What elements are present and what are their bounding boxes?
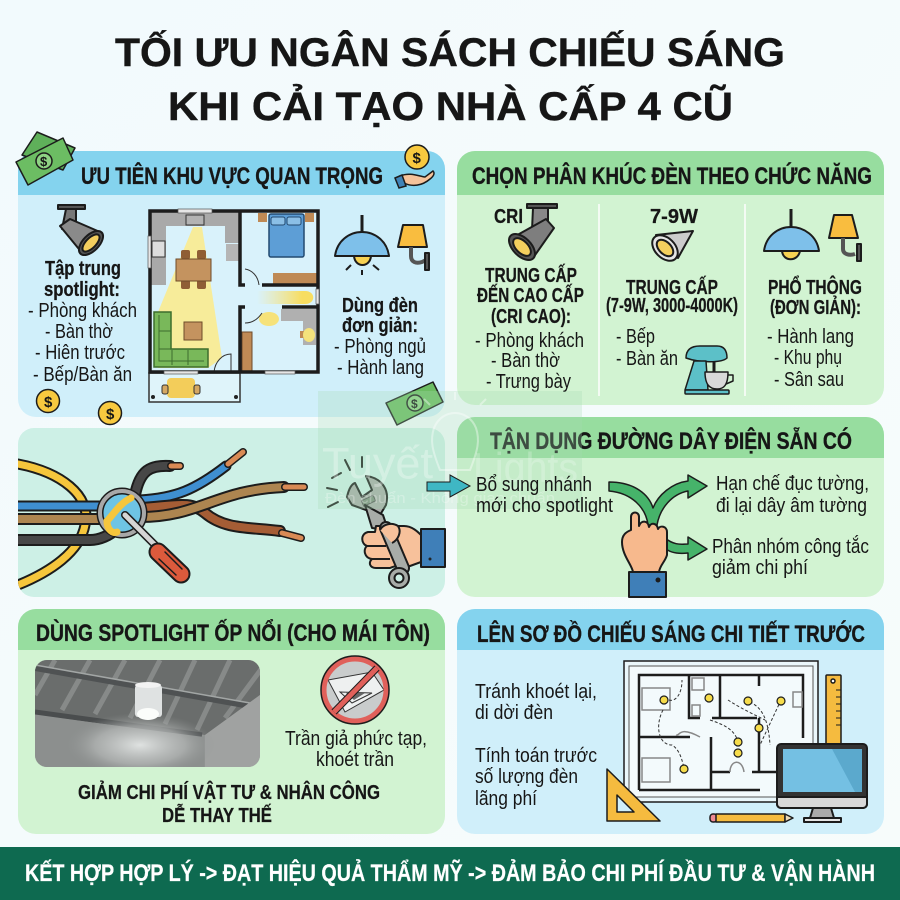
text: dùng đèn đơn giản: [334, 295, 426, 379]
panel header: chọn phân khúc: [457, 151, 884, 195]
text: phân nhóm công tắc: Phân nhóm công tắc: [712, 535, 869, 558]
column: phổ thông: - Hành lang: [767, 326, 854, 348]
watermark: Đèn chuẩn - Không gian chuẩn: [325, 490, 555, 507]
icon: coin centre: $: [106, 406, 115, 423]
text: trần giả: khoét trần: [316, 749, 394, 771]
text: trần giả: Trần giả phức tạp,: [285, 728, 427, 750]
icon: coin and hand: [395, 145, 434, 188]
column: phổ thông: (ĐƠN GIẢN):: [770, 296, 861, 319]
icon: set square: [607, 769, 660, 821]
title: [115, 29, 785, 129]
icon: wrench in hand: [327, 457, 445, 588]
text: phân nhóm công tắc: [712, 535, 869, 579]
watermark: Lights: [473, 444, 578, 491]
icon: money bills top left: $: [40, 154, 48, 169]
text: hạn chế đục tường: đi lại dây âm tường: [716, 495, 867, 517]
panel header: sơ đồ: [457, 609, 884, 650]
text: bổ sung nhánh: [476, 474, 613, 517]
blueprint plan: [624, 661, 818, 802]
text: tính toán trước: [475, 745, 597, 810]
panel header: tận dụng: [457, 417, 884, 458]
column: trung cấp đến cao cấp: ĐẾN CAO CẤP: [477, 284, 584, 307]
title: KHI CẢI TẠO NHÀ CẤP 4 CŨ: [168, 83, 733, 129]
column: trung cấp: [606, 206, 738, 394]
icon: hand pointing: [622, 512, 667, 597]
text: tập trung spotlight: Tập trung: [45, 258, 121, 280]
panel header: spotlight ốp nổi: [18, 609, 445, 650]
panel header: spotlight ốp nổi: DÙNG SPOTLIGHT ỐP NỔI (CHO MÁI TÔN): [36, 619, 430, 647]
column: trung cấp: 7-9W: [650, 206, 698, 228]
text: tập trung spotlight: - Hiên trước: [35, 342, 125, 364]
text: dùng đèn đơn giản: Dùng đèn: [342, 295, 418, 317]
icon: coin centre: [98, 402, 122, 424]
text: giảm chi phí: [78, 780, 380, 827]
column: phổ thông: [764, 209, 862, 391]
icon: no false ceiling: [321, 656, 389, 724]
column: trung cấp: - Bàn ăn: [616, 348, 678, 370]
column: trung cấp đến cao cấp: TRUNG CẤP: [485, 264, 577, 287]
text: tránh khoét lại: [475, 681, 597, 724]
text: tập trung spotlight: - Phòng khách: [28, 300, 137, 322]
text: hạn chế đục tường: Hạn chế đục tường,: [716, 473, 869, 495]
text: tính toán trước: Tính toán trước: [475, 745, 597, 767]
column: trung cấp: TRUNG CẤP: [626, 276, 718, 299]
footer banner: [0, 847, 900, 900]
icon: pencil: [710, 814, 793, 822]
text: phân nhóm công tắc: giảm chi phí: [712, 557, 808, 579]
text: giảm chi phí: GIẢM CHI PHÍ VẬT TƯ & NHÂN CÔNG: [78, 780, 380, 804]
column: trung cấp: - Bếp: [616, 326, 655, 348]
text: dùng đèn đơn giản: đơn giản:: [342, 315, 418, 337]
column: trung cấp đến cao cấp: (CRI CAO):: [491, 306, 571, 328]
text: tránh khoét lại: di dời đèn: [475, 702, 553, 724]
panel: sơ đồ chiếu sáng: [457, 609, 884, 834]
text: bổ sung nhánh: mới cho spotlight: [476, 495, 613, 517]
column: trung cấp đến cao cấp: - Bàn thờ: [491, 350, 560, 372]
panel: tận dụng đường dây điện: [457, 417, 884, 597]
text: dùng đèn đơn giản: - Hành lang: [337, 357, 424, 379]
column: trung cấp đến cao cấp: - Trưng bày: [486, 371, 571, 393]
text: bổ sung nhánh: Bổ sung nhánh: [476, 474, 592, 496]
text: tập trung spotlight: spotlight:: [44, 279, 120, 301]
text: trần giả: [285, 728, 427, 771]
text: tính toán trước: lãng phí: [475, 788, 537, 810]
text: tính toán trước: số lượng đèn: [475, 766, 578, 788]
column: phổ thông: - Sân sau: [774, 369, 844, 391]
panel header: ưu tiên khu vực: ƯU TIÊN KHU VỰC QUAN TRỌNG: [81, 162, 383, 190]
text: dùng đèn đơn giản: - Phòng ngủ: [334, 336, 426, 358]
panel: dây điện: [18, 428, 445, 597]
icon: stand mixer: [685, 346, 733, 394]
panel: ưu tiên khu vực quan trọng: [18, 151, 445, 417]
text: hạn chế đục tường: [716, 473, 869, 517]
floor plan: [148, 209, 319, 402]
column: trung cấp đến cao cấp: - Phòng khách: [475, 330, 584, 352]
panel header: ưu tiên khu vực: [18, 151, 445, 195]
photo: surface spotlight under metal roof: [35, 660, 262, 777]
arrow: branching green: [609, 475, 707, 560]
title: TỐI ƯU NGÂN SÁCH CHIẾU SÁNG: [115, 29, 785, 75]
icon: ruler: [826, 675, 841, 745]
icon: coin and hand: $: [412, 150, 422, 167]
text: tránh khoét lại: Tránh khoét lại,: [475, 681, 597, 703]
arrow: teal connector: [427, 475, 470, 497]
watermark: [318, 391, 582, 509]
watermark: Tuyết: [322, 439, 433, 488]
icon: monitor: [777, 744, 867, 822]
panel: spotlight ốp nổi: [18, 609, 445, 834]
column: trung cấp đến cao cấp: [475, 204, 584, 393]
icon: coin left: $: [44, 394, 53, 411]
column: phổ thông: - Khu phụ: [774, 347, 842, 369]
icon: money bills top left: [16, 132, 75, 185]
icon: track spotlight: [58, 205, 107, 259]
panel: chọn phân khúc đèn: [457, 151, 884, 405]
text: tập trung spotlight: [28, 258, 137, 386]
text: giảm chi phí: DỄ THAY THẾ: [162, 804, 272, 827]
column: trung cấp: (7-9W, 3000-4000K): [606, 295, 738, 317]
icon: money bill centre: $: [411, 397, 418, 411]
light points: [660, 694, 785, 773]
icon: pendant lamp and wall sconce: [335, 215, 429, 275]
icon: money bill centre: [386, 382, 443, 425]
icon: screwdriver: [125, 515, 182, 575]
icon: coin left: [36, 390, 60, 412]
illustration: electrical wires: [18, 452, 304, 585]
column: trung cấp đến cao cấp: CRI: [494, 206, 523, 228]
column: phổ thông: PHỔ THÔNG: [768, 275, 862, 299]
text: tập trung spotlight: - Bếp/Bàn ăn: [33, 364, 132, 386]
text: tập trung spotlight: - Bàn thờ: [45, 321, 113, 343]
